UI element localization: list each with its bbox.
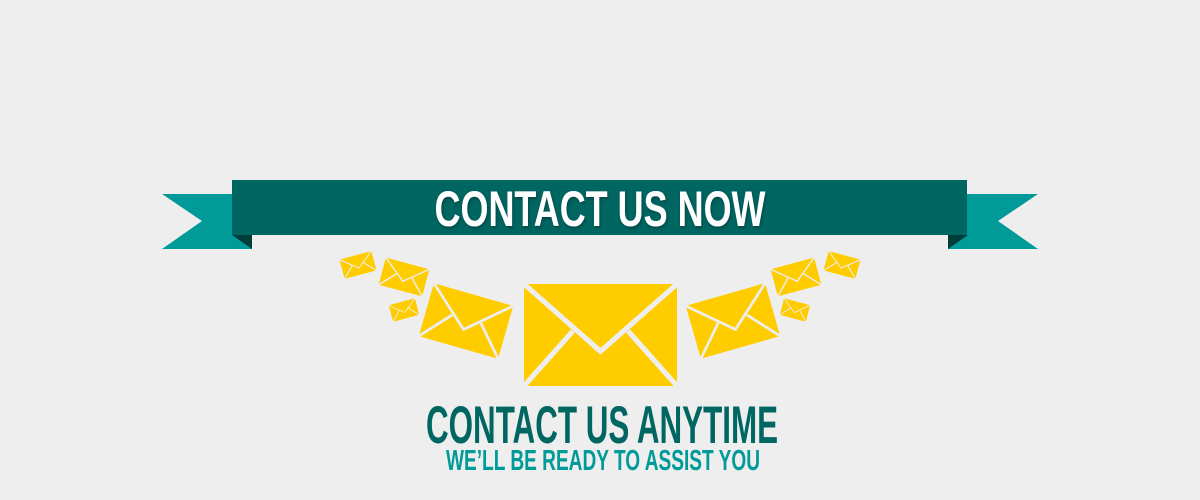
banner main band — [232, 180, 967, 235]
banner — [162, 180, 1038, 249]
icon: left small envelope 1 — [339, 251, 377, 279]
right ribbon tail — [948, 194, 1038, 249]
heading: contact us anytime: CONTACT US ANYTIME — [426, 396, 778, 455]
icon: left small envelope 2 — [379, 258, 429, 296]
subheading: WE’LL BE READY TO ASSIST YOU — [446, 445, 760, 477]
icon: right big envelope — [686, 283, 780, 359]
banner title: CONTACT US NOW — [434, 181, 766, 237]
icon: left small envelope 3 — [389, 298, 419, 322]
icon: main envelope — [524, 284, 677, 386]
icon: right small envelope 3 — [780, 298, 810, 322]
left ribbon tail — [162, 194, 252, 249]
icon: left big envelope — [419, 283, 513, 359]
icon: right small envelope 1 — [823, 251, 861, 279]
icon: right small envelope 2 — [771, 258, 821, 296]
envelopes group — [339, 251, 861, 386]
